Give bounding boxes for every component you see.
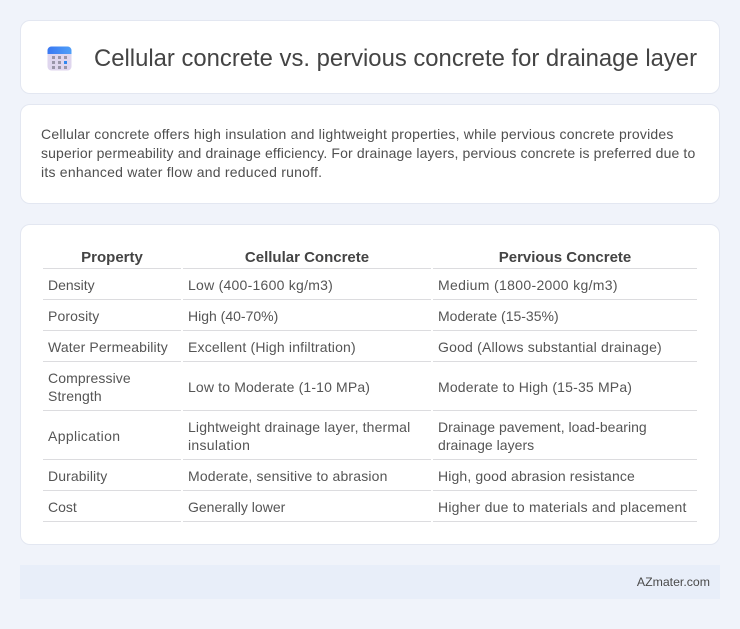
row: Density: Low (400-1600 kg/m3) (188, 277, 333, 293)
row: Compressive Strength: Strength (48, 388, 102, 404)
panel: comparison table card (20, 224, 720, 545)
row: Durability: Durability (48, 468, 107, 484)
row: Durability: Moderate, sensitive to abrasion (188, 468, 388, 484)
row: Porosity: High (40-70%) (188, 308, 278, 324)
row: Porosity: Porosity (48, 308, 99, 324)
row: Porosity: Moderate (15-35%) (438, 308, 559, 324)
row: Cost: Generally lower (188, 499, 285, 515)
row: Application: Lightweight drainage layer, thermal (188, 419, 410, 435)
row: Application: Application (48, 428, 120, 444)
row: Water Permeability (48, 339, 662, 355)
row: Application: Drainage pavement, load-bearing (438, 419, 647, 435)
summary text: its enhanced water flow and reduced runoff. (41, 164, 322, 180)
row: Water Permeability: Water Permeability (48, 339, 168, 355)
panel: title card (20, 20, 720, 94)
panel: summary card (20, 104, 720, 204)
row: Durability: High, good abrasion resistance (438, 468, 635, 484)
summary text: superior permeability and drainage efficiency. For drainage layers, pervious concrete is preferred due to (41, 144, 695, 160)
row: Application (48, 419, 647, 453)
row: Compressive Strength (48, 370, 632, 404)
table header: Pervious Concrete: Pervious Concrete (499, 248, 631, 266)
comparison table (43, 248, 697, 522)
row: Durability (48, 468, 635, 484)
table header: Cellular Concrete: Cellular Concrete (245, 248, 369, 266)
row: Water Permeability: Good (Allows substantial drainage) (438, 339, 662, 355)
row: Compressive Strength: Moderate to High (15-35 MPa) (438, 379, 632, 395)
icon: calendar (48, 46, 72, 70)
row: Cost: Cost (48, 499, 77, 515)
row: Application: insulation (188, 437, 250, 453)
title: Cellular concrete vs. pervious concrete for drainage layer (94, 45, 697, 72)
row: Cost (48, 499, 687, 515)
summary text: Cellular concrete offers high insulation and lightweight properties, while pervious concrete provides (41, 126, 674, 142)
row: Application: drainage layers (438, 437, 534, 453)
row: Porosity (48, 308, 559, 324)
summary text (41, 126, 695, 180)
footer bar (20, 565, 720, 599)
row: Cost: Higher due to materials and placement (438, 499, 687, 515)
row: Compressive Strength: Compressive (48, 370, 131, 386)
footer brand: AZmater.com (637, 575, 710, 589)
row: Density: Medium (1800-2000 kg/m3) (438, 277, 618, 293)
row: Water Permeability: Excellent (High infiltration) (188, 339, 356, 355)
row: Density (48, 277, 618, 293)
row: Compressive Strength: Low to Moderate (1-10 MPa) (188, 379, 370, 395)
row: Density: Density (48, 277, 95, 293)
table header: Property: Property (81, 248, 143, 266)
